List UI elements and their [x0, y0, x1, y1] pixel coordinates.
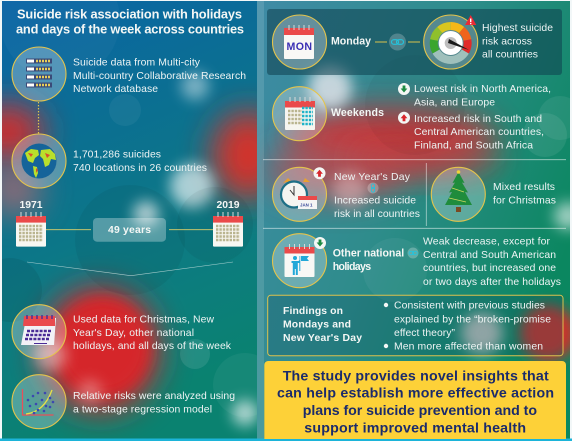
bottom cyan frame line — [0, 438, 572, 441]
text: lowest risk — [414, 84, 551, 108]
icon: link connector — [375, 34, 420, 50]
timeline: 1971 to 2019 — [16, 200, 243, 247]
text: analysis method: Relative risks were analyzed using — [73, 391, 235, 402]
text: data source — [73, 58, 246, 95]
conclusion box — [264, 361, 566, 439]
panel: right background — [257, 1, 572, 439]
text: New Year's finding: Increased suicide — [334, 196, 416, 206]
duration label — [93, 218, 166, 242]
icon: weekend calendar — [272, 87, 326, 141]
panel: New Year's Day — [272, 167, 420, 221]
label: Other national holidays: holidays — [333, 261, 371, 273]
findings bullets: explained by the “broken-promise — [394, 314, 551, 326]
icon: calendar 2019 — [213, 212, 243, 247]
icon: down arrow — [398, 83, 410, 95]
text: data source: Network database — [73, 84, 158, 95]
findings heading: Findings on — [283, 306, 343, 317]
text: Monday finding: risk across — [482, 36, 532, 48]
label: Weekends: Weekends — [331, 107, 384, 119]
findings bullets — [384, 300, 551, 352]
panel: findings on Mondays and New Year's Day — [268, 295, 563, 356]
icon: flag calendar — [272, 234, 326, 288]
text: data source: Multi-country Collaborative Research — [73, 71, 246, 82]
panel: Christmas — [431, 167, 556, 221]
text: Monday finding: Highest suicide — [482, 23, 553, 34]
text: analysis method — [73, 391, 235, 416]
text: holidays used: Year's Day, other national — [73, 328, 194, 339]
text: other holidays finding: or two days after the holidays — [423, 277, 561, 288]
text: increased risk — [414, 114, 544, 152]
findings heading — [283, 306, 362, 344]
text: lowest risk: Lowest risk in North America, — [414, 84, 551, 95]
icon: alarm clock with date — [272, 167, 326, 221]
findings bullets: Consistent with previous studies — [394, 300, 545, 312]
findings bullets: effect theory” — [394, 328, 456, 339]
text: New Year's finding — [334, 196, 420, 220]
text: increased risk: Central American countries, — [414, 127, 544, 138]
text: holidays used: holidays, and all days of the week — [73, 341, 232, 352]
title: and days of the week across countries — [16, 22, 244, 36]
text: Monday finding: all countries — [482, 50, 538, 60]
icon: regression chart — [12, 375, 66, 429]
icon: Monday calendar: MON — [286, 41, 312, 53]
text: Monday finding — [482, 23, 553, 60]
text: data source: Suicide data from Multi-city — [73, 58, 201, 68]
panel: Monday — [267, 9, 562, 75]
icon: link — [368, 182, 378, 194]
label: Monday: Monday — [331, 36, 371, 48]
text: other holidays finding: Weak decrease, except for — [423, 236, 551, 248]
timeline: 1971 to 2019: 1971 — [20, 200, 43, 211]
text: sample size: 740 locations in 26 countries — [73, 163, 207, 174]
chevron divider — [27, 262, 233, 276]
title — [16, 6, 244, 36]
text: other holidays finding: Central and South American — [423, 250, 556, 261]
conclusion box: can help establish more effective action — [277, 386, 554, 402]
text: holidays used — [73, 314, 232, 352]
dotted connector — [38, 102, 40, 134]
text: Christmas finding: for Christmas — [493, 196, 556, 206]
conclusion box: plans for suicide prevention and to — [303, 403, 537, 419]
text: other holidays finding — [423, 236, 561, 288]
icon: holiday calendar — [12, 305, 66, 359]
findings heading: Mondays and — [283, 320, 351, 330]
text: increased risk: Increased risk in South and — [414, 114, 542, 125]
label: Other national holidays — [333, 248, 404, 273]
text: Christmas finding: Mixed results — [493, 182, 555, 193]
duration label: 49 years — [108, 225, 151, 236]
text: lowest risk: Asia, and Europe — [414, 98, 495, 108]
icon: calendar 1971 — [16, 212, 46, 247]
text: increased risk: Finland, and South Africa — [414, 140, 533, 152]
text: other holidays finding: countries, but increased one — [423, 263, 556, 274]
icon: up badge — [314, 167, 326, 179]
text: New Year's Day: New Year's Day — [334, 172, 411, 183]
text: New Year's finding: risk in all countries — [334, 209, 420, 220]
text: Christmas finding — [493, 182, 556, 206]
icon: Monday calendar — [272, 15, 326, 69]
panel: Weekends — [272, 83, 551, 152]
timeline: 1971 to 2019: 2019 — [216, 200, 240, 211]
icon: alarm clock with date: JAN 1 — [300, 202, 313, 208]
icon: Christmas tree — [431, 167, 485, 221]
panel: left background — [2, 1, 257, 438]
conclusion box: support improved mental health — [304, 421, 526, 437]
findings bullets: Men more affected than women — [394, 342, 543, 352]
icon: link — [408, 248, 418, 258]
title: Suicide risk association with holidays — [17, 6, 242, 22]
panel: Other national holidays — [272, 234, 561, 288]
text: holidays used: Used data for Christmas, New — [73, 314, 214, 326]
icon: risk gauge — [424, 15, 478, 69]
icon: up arrow — [398, 112, 410, 124]
text: sample size — [73, 150, 207, 174]
icon: globe — [12, 134, 66, 188]
text: analysis method: a two-stage regression model — [73, 404, 212, 416]
findings heading: New Year's Day — [283, 333, 362, 344]
icon: database server — [12, 47, 66, 101]
text: sample size: 1,701,286 suicides — [73, 150, 161, 160]
label: Other national holidays: Other national — [333, 248, 404, 260]
conclusion box: The study provides novel insights that — [283, 368, 549, 384]
icon: down badge — [314, 237, 326, 249]
